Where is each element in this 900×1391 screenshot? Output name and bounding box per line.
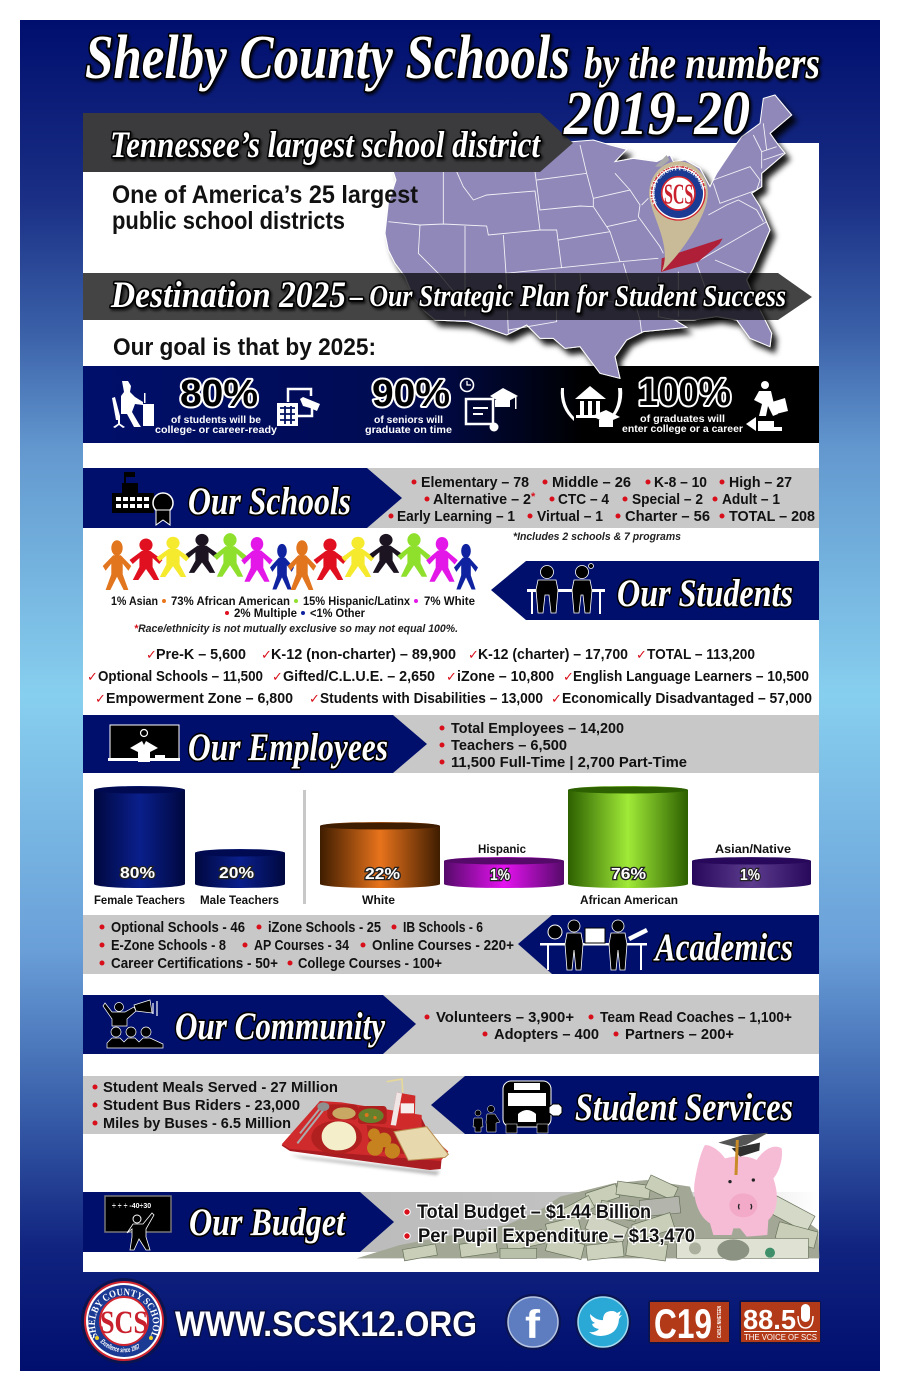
budget figures xyxy=(404,1202,695,1247)
banner: Destination 2025 strategic plan xyxy=(83,273,812,320)
chart: teacher gender: Female Teachers xyxy=(94,893,185,907)
icon: students with globe, computer, telescope xyxy=(540,920,648,970)
chart: employee race and ethnicity: Hispanic xyxy=(478,842,526,856)
school counts: K-8 – 10 xyxy=(654,474,707,491)
community counts: Partners – 200+ xyxy=(625,1026,734,1043)
text: One of America's 25 largest: One of America’s 25 largest xyxy=(112,181,419,209)
student enrollment checklist: Gifted/C.L.U.E. – 2,650 xyxy=(283,668,435,685)
school counts: Early Learning – 1 xyxy=(397,508,515,525)
heading: Our Students xyxy=(617,572,793,615)
lake: gray patch xyxy=(655,155,669,167)
student services counts: Student Bus Riders - 23,000 xyxy=(103,1097,300,1114)
heading: Our Community xyxy=(175,1005,386,1048)
student services counts: Miles by Buses - 6.5 Million xyxy=(103,1115,291,1132)
school counts: Charter – 56 xyxy=(625,508,710,525)
student enrollment checklist: ✓ xyxy=(146,648,157,663)
school counts: Special – 2 xyxy=(632,491,703,508)
chart: teacher gender: 20% xyxy=(219,865,254,882)
race and ethnicity legend: <1% Other xyxy=(310,606,365,620)
race and ethnicity legend xyxy=(111,594,475,620)
heading: Our Employees xyxy=(188,726,388,769)
paper doll chain of students xyxy=(103,533,478,590)
student enrollment checklist: ✓ xyxy=(95,692,106,707)
goal: 80 percent: 80% xyxy=(180,373,258,415)
school counts: Elementary – 78 xyxy=(421,474,529,491)
title xyxy=(85,24,820,148)
academics counts: E-Zone Schools - 8 xyxy=(111,937,226,954)
text: One of America's 25 largest: public school districts xyxy=(112,207,345,235)
icon: Twitter xyxy=(575,1294,631,1350)
tray compartments xyxy=(311,1104,442,1158)
race and ethnicity legend: 15% Hispanic/Latinx xyxy=(303,594,410,608)
state: Tennessee highlighted xyxy=(661,238,723,272)
goal: 90 percent xyxy=(365,373,452,436)
goal: 90 percent: 90% xyxy=(372,373,450,415)
map pin with SCS logo xyxy=(649,161,708,272)
white content panel xyxy=(83,143,819,1272)
map pin with SCS logo: SHELBY COUNTY SCHOOLS xyxy=(650,166,706,204)
budget figures: Total Budget – $1.44 Billion xyxy=(417,1202,651,1223)
title: 2019-20 xyxy=(563,80,750,148)
goal: 100 percent: enter college or a career xyxy=(622,424,743,435)
employee counts: Teachers – 6,500 xyxy=(451,737,567,754)
employee counts xyxy=(440,720,687,771)
heading: Our Schools xyxy=(188,480,351,523)
goal: 80 percent: of students will be xyxy=(171,415,261,426)
website URL: WWW.SCSK12.ORG xyxy=(175,1305,477,1344)
banner: Destination 2025 strategic plan: Destination 2025 xyxy=(110,275,346,316)
student enrollment checklist: iZone – 10,800 xyxy=(457,668,554,685)
text: One of America's 25 largest xyxy=(112,181,419,235)
goals band xyxy=(83,366,819,443)
school counts: CTC – 4 xyxy=(558,491,610,508)
chart: teacher gender xyxy=(94,786,285,907)
icon: teacher at chalkboard xyxy=(108,725,180,762)
mashed potatoes xyxy=(322,1121,356,1150)
student enrollment checklist: Students with Disabilities – 13,000 xyxy=(320,690,543,707)
banner: Destination 2025 strategic plan: – Our Strategic Plan for Student Success xyxy=(349,278,786,313)
academics counts xyxy=(100,919,514,972)
goal: 80 percent xyxy=(155,373,277,436)
student enrollment checklist: TOTAL – 113,200 xyxy=(647,646,755,663)
heading: Academics xyxy=(653,926,793,969)
goal: 90 percent: graduate on time xyxy=(365,425,452,436)
banner: Tennessee's largest school district: Tennessee’s largest school district xyxy=(110,125,541,166)
icon: students at desk xyxy=(527,564,605,614)
icon: person climbing stairs xyxy=(746,381,788,431)
chicken nuggets xyxy=(367,1128,400,1159)
chart: teacher gender: 80% xyxy=(120,865,155,882)
heading: Student Services xyxy=(575,1086,793,1129)
school counts: Alternative – 2 xyxy=(433,491,531,508)
panel: Our Budget xyxy=(83,1133,819,1261)
student enrollment checklist: Optional Schools – 11,500 xyxy=(98,668,263,685)
pile of money xyxy=(357,1175,819,1261)
student enrollment checklist: ✓ xyxy=(446,670,457,685)
school counts: TOTAL – 208 xyxy=(729,508,815,525)
goal: 80 percent: college- or career-ready xyxy=(155,425,277,436)
heading: Our Budget xyxy=(189,1201,346,1244)
cookie xyxy=(332,1107,356,1119)
student enrollment checklist: ✓ xyxy=(261,648,272,663)
chart: employee race and ethnicity: Asian/Native xyxy=(715,842,791,856)
icon: teacher at math chalkboard xyxy=(105,1196,171,1250)
map of United States xyxy=(385,94,800,389)
icon: Facebook: f xyxy=(525,1303,541,1347)
text: Our goal: Our goal is that by 2025: xyxy=(113,334,376,361)
student enrollment checklist: ✓ xyxy=(636,648,647,663)
student enrollment checklist: Empowerment Zone – 6,800 xyxy=(106,690,293,707)
panel: Academics xyxy=(83,915,819,974)
school counts: Middle – 26 xyxy=(552,474,631,491)
race and ethnicity legend: 1% Asian xyxy=(111,594,158,608)
chart: employee race and ethnicity: 1% xyxy=(740,867,760,884)
academics counts: Optional Schools - 46 xyxy=(111,919,245,936)
student enrollment checklist: ✓ xyxy=(309,692,320,707)
school counts: Adult – 1 xyxy=(722,491,780,508)
milk carton and straw xyxy=(387,1079,415,1126)
logo: C19: C19 xyxy=(654,1300,712,1347)
chart: employee race and ethnicity: 1% xyxy=(490,867,510,884)
school counts: * xyxy=(531,491,536,503)
school counts xyxy=(388,474,815,525)
icon: college building with laurels and cap xyxy=(561,386,622,427)
logo: 88.5 radio xyxy=(739,1300,821,1344)
budget figures: Per Pupil Expenditure – $13,470 xyxy=(418,1226,695,1247)
chart: teacher gender: Male Teachers xyxy=(200,893,279,907)
student enrollment checklist: ✓ xyxy=(563,670,574,685)
icon: school bus and children xyxy=(473,1081,562,1133)
bread xyxy=(394,1127,448,1160)
icon: speaker with megaphone and audience xyxy=(103,1000,163,1048)
logo: 88.5 radio: THE VOICE OF SCS xyxy=(744,1332,817,1342)
student enrollment checklist: ✓ xyxy=(272,670,283,685)
icon: teacher at math chalkboard: ÷ ÷ ÷ -40÷30 xyxy=(112,1203,151,1210)
map pin with SCS logo: SCS xyxy=(664,179,693,210)
panel: Our Schools xyxy=(83,468,819,528)
academics counts: Career Certifications - 50+ xyxy=(111,955,278,972)
community counts: Volunteers – 3,900+ xyxy=(436,1009,574,1026)
employee counts: 11,500 Full-Time | 2,700 Part-Time xyxy=(451,754,687,771)
banner: Tennessee's largest school district xyxy=(83,113,573,172)
chart divider xyxy=(303,790,306,904)
panel: Our Employees xyxy=(83,715,819,773)
panel: Our Students xyxy=(491,561,819,620)
panel: Our Community xyxy=(83,995,819,1054)
lunch tray with food xyxy=(282,1079,448,1175)
student enrollment checklist: ✓ xyxy=(87,670,98,685)
student enrollment checklist: K-12 (non-charter) – 89,900 xyxy=(271,646,456,663)
title: Shelby County Schools xyxy=(85,24,570,92)
race and ethnicity legend: 7% White xyxy=(424,594,475,608)
community counts xyxy=(424,1009,792,1043)
icon: student at desk xyxy=(112,381,154,428)
goal: 90 percent: of seniors will xyxy=(374,415,443,426)
academics counts: IB Schools - 6 xyxy=(403,919,483,936)
student services counts xyxy=(92,1079,338,1132)
fork and spoon xyxy=(297,1102,329,1143)
school counts: Virtual – 1 xyxy=(537,508,603,525)
student enrollment checklist: Economically Disadvantaged – 57,000 xyxy=(562,690,812,707)
logo: Shelby County Schools seal: Excellence since 1867 xyxy=(100,1339,140,1352)
goal: 100 percent: of graduates will xyxy=(640,414,725,425)
state borders xyxy=(388,123,783,333)
panel: Student Services xyxy=(83,1076,819,1134)
academics counts: Online Courses - 220+ xyxy=(372,937,514,954)
footnote: includes: *Includes 2 schools & 7 programs xyxy=(513,531,681,543)
chart: employee race and ethnicity: 22% xyxy=(365,866,400,883)
icon: school with ribbon xyxy=(112,472,173,525)
student enrollment checklist: ✓ xyxy=(551,692,562,707)
goal: 100 percent xyxy=(622,372,743,435)
logo: Shelby County Schools seal xyxy=(81,1278,167,1364)
chart: employee race and ethnicity: 76% xyxy=(611,866,646,883)
chart: employee race and ethnicity xyxy=(320,786,811,907)
academics counts: College Courses - 100+ xyxy=(298,955,442,972)
piggy bank with graduation cap xyxy=(694,1133,782,1237)
student enrollment checklist xyxy=(87,646,812,707)
school counts: High – 27 xyxy=(729,474,792,491)
student enrollment checklist: English Language Learners – 10,500 xyxy=(573,668,809,685)
student enrollment checklist: Pre-K – 5,600 xyxy=(156,646,246,663)
student enrollment checklist: K-12 (charter) – 17,700 xyxy=(478,646,628,663)
chart: employee race and ethnicity: White xyxy=(362,893,395,907)
logo: Shelby County Schools seal: SHELBY COUNTY SCHOOLS xyxy=(88,1288,160,1339)
student enrollment checklist: ✓ xyxy=(468,648,479,663)
race and ethnicity legend: 73% African American xyxy=(171,594,290,608)
icon: calculator and phone xyxy=(277,389,320,426)
community counts: Adopters – 400 xyxy=(494,1026,599,1043)
icon: clock, diploma and cap xyxy=(460,378,518,432)
footnote: race/ethnicity: *Race/ethnicity is not mutually exclusive so may not equal 100%. xyxy=(134,623,458,635)
goal: 100 percent: 100% xyxy=(638,372,731,414)
academics counts: AP Courses - 34 xyxy=(254,937,350,954)
vegetables xyxy=(358,1108,384,1123)
academics counts: iZone Schools - 25 xyxy=(268,919,381,936)
student services counts: Student Meals Served - 27 Million xyxy=(103,1079,338,1096)
icon: Facebook xyxy=(505,1294,561,1350)
chart: employee race and ethnicity: African American xyxy=(580,893,678,907)
logo: 88.5 radio: 88.5 xyxy=(743,1304,796,1335)
logo: C19: CABLE NINETEEN xyxy=(717,1306,723,1338)
title: by the numbers xyxy=(584,39,820,88)
employee counts: Total Employees – 14,200 xyxy=(451,720,624,737)
community counts: Team Read Coaches – 1,100+ xyxy=(600,1009,792,1026)
hundred dollar bill xyxy=(677,1238,808,1261)
logo: Shelby County Schools seal: SCS xyxy=(100,1305,148,1341)
race and ethnicity legend: 2% Multiple xyxy=(234,606,297,620)
